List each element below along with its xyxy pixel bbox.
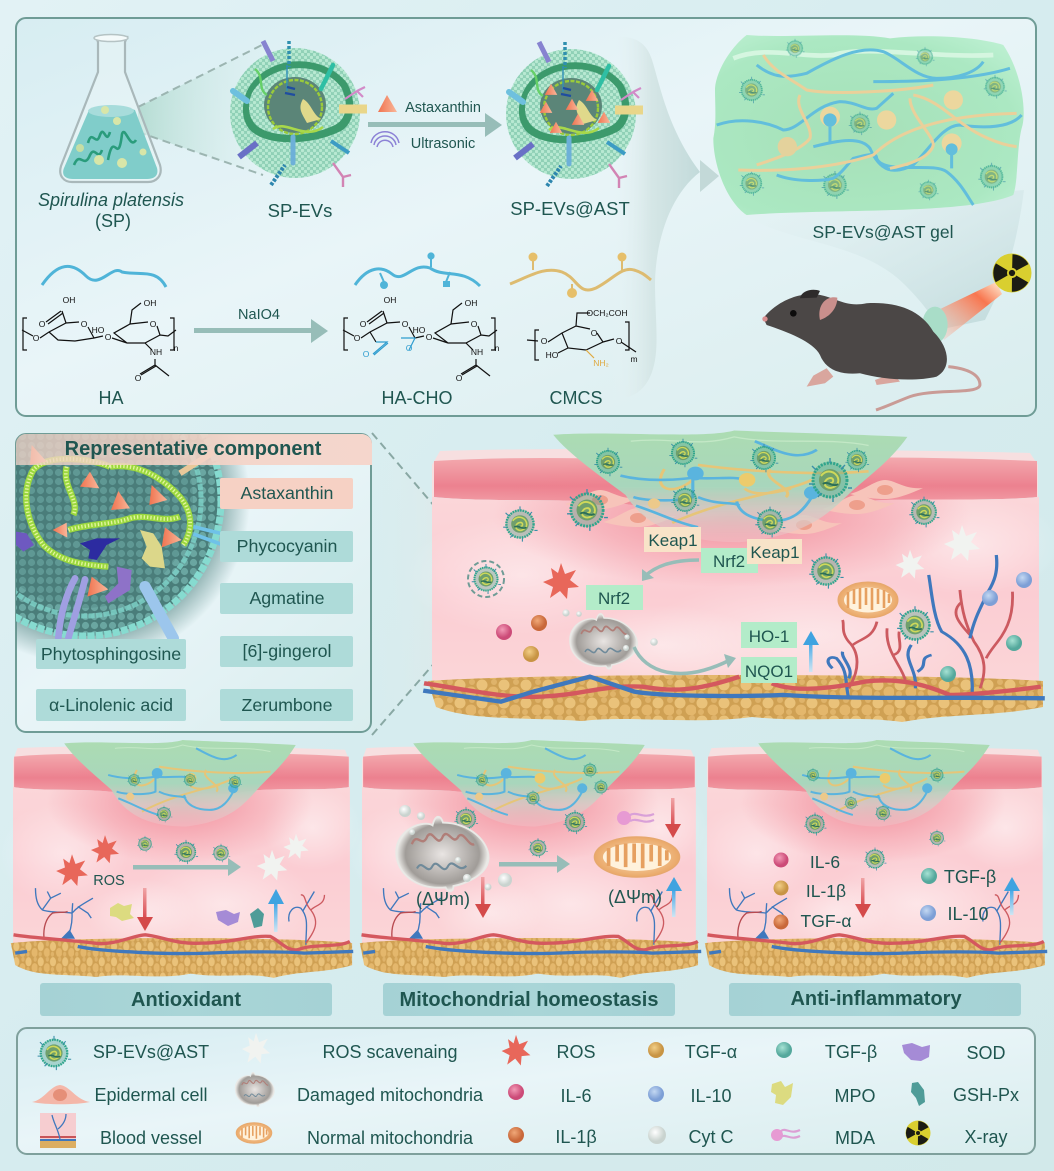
chemical structure: HA-CHO [343,295,500,383]
arrow: upregulation [803,631,819,672]
label: Agmatine [220,583,353,614]
chemical structure: HA-CHO: HO [413,325,426,335]
icon: SOD and GSH-Px [216,908,264,928]
chemical structure: HA: O [81,319,88,329]
label: Antioxidant: Antioxidant [131,989,241,1011]
list: pro-inflammatory cytokines: TGF-α [801,911,851,931]
chemical structure: HA: O [135,373,142,383]
hydrogel [64,740,296,827]
hydrogel [758,740,990,827]
funnel from gel to mouse [743,190,1024,330]
icon: MPO [110,903,134,921]
wedge: zoom from flask to SP-EVs [138,45,263,175]
label: Mitochondrial homeostasis: Mitochondrial homeostasis [400,989,658,1011]
blood vessels [708,888,1047,954]
legend: SP-EVs@AST: SP-EVs@AST [93,1042,209,1062]
label: Anti-inflammatory: Anti-inflammatory [790,988,962,1010]
SP-EVs@AST vesicle [506,42,643,188]
icon: scavenged ROS [257,834,309,880]
legend: Normal mitochondria [236,1123,474,1148]
label: Phycocyanin: Phycocyanin [237,536,337,556]
panel: preparation of SP-EVs@AST gel [16,18,1036,416]
label: Nrf2: Nrf2 [598,589,630,608]
label: Spirulina platensis: (SP) [95,211,131,231]
chemical structure: HA: HO [92,325,105,335]
legend: MPO [771,1081,876,1106]
legend: Blood vessel: Blood vessel [100,1128,202,1148]
legend: GSH-Px: GSH-Px [953,1085,1019,1105]
hydrogel [413,740,645,827]
arrow: increase [268,889,284,932]
chemical structure: HA-CHO: OH [465,298,477,308]
label: Keap1: Keap1 [648,531,698,550]
label: Zerumbone [220,689,353,721]
legend: Cyt C: Cyt C [688,1127,734,1147]
heading: Representative component: Representative component [65,438,322,460]
label: Zerumbone: Zerumbone [242,695,333,715]
label: HO-1 [741,622,797,648]
label: Spirulina platensis [38,190,184,231]
label: α-Linolenic acid [36,689,186,721]
label: Phytosphingosine: Phytosphingosine [41,644,181,664]
icon: CMCS chain [510,252,651,298]
panel: anti-inflammatory [690,740,1054,978]
arrow: restoration [499,855,570,873]
SP-EVs around wound [503,489,939,644]
chemical structure: HA-CHO: O [426,332,433,342]
chemical structure: HA-CHO: O [471,319,478,329]
panel: legend [17,1028,1035,1154]
label: NQO1: NQO1 [745,662,793,681]
brace connecting SP-EVs@AST, HA-CHO and CMCS to the gel [610,37,700,400]
label: Nrf2 complex [701,548,758,573]
blood vessels [362,888,701,954]
skin block [402,443,1054,722]
chemical structure: CMCS: O [591,328,598,338]
label: Astaxanthin [220,478,353,509]
label: [6]-gingerol [220,636,353,667]
icon: ROS [56,835,125,889]
chemical structure: CMCS: OCH₂COH [586,308,628,318]
skin block [690,741,1054,978]
SP-EVs [804,813,945,870]
chemical structure: HA-CHO: OH [384,295,396,305]
label: Keap1 second: Keap1 [750,543,800,562]
panel: mitochondrial homeostasis [346,740,708,978]
arrow: NaIO4 oxidation: NaIO4 [238,307,280,323]
legend: SP-EVs@AST [38,1036,209,1070]
epidermal cells [565,480,923,534]
legend: GSH-Px [911,1082,1019,1106]
legend: IL-6 [508,1084,592,1106]
legend: SOD [902,1043,1006,1063]
legend: Epidermal cell: Epidermal cell [94,1085,208,1105]
legend: SOD: SOD [966,1043,1006,1063]
legend: Blood vessel [40,1113,202,1148]
label: Phycocyanin [220,531,353,562]
spheres: cytokines [496,615,547,662]
SP-EVs inside gel [594,439,869,537]
chemical structure: CMCS: m [630,354,638,364]
SP-EVs vesicle [230,41,367,187]
chemical structure: HA-CHO: n [495,343,500,353]
icon: normal mitochondrion [838,582,898,618]
icon: ROS [543,563,579,599]
legend: IL-1β: IL-1β [555,1127,597,1147]
arrow: loading astaxanthin with ultrasound [368,95,502,152]
legend: MPO: MPO [834,1086,876,1106]
label: Antioxidant [40,983,332,1016]
chemical structure: HA: OH [144,298,156,308]
icon: X-ray source and beam [934,254,1032,340]
gel: SP-EVs@AST hydrogel [713,35,1024,215]
arrow: MDA decrease [665,798,681,838]
icon: normal mitochondrion [594,837,680,877]
chemical structure: HA: O [105,332,112,342]
illustration: mouse with gel [762,290,980,410]
label: HA: HA [98,388,124,408]
icon: ROS scavenged [896,525,980,579]
arrow: loading astaxanthin with ultrasound: Ultrasonic [411,136,475,152]
legend: Cyt C [648,1126,734,1147]
legend: TGF-α [648,1042,737,1062]
legend: IL-1β [508,1127,597,1147]
spheres: anti-inflammatory cytokines [940,572,1032,682]
chemical structure: HA: O [33,333,40,343]
list: pro-inflammatory cytokines: IL-1β [806,881,846,901]
chemical structure: CMCS: NH₂ [593,358,609,368]
chemical structure: CMCS [527,308,638,368]
label: SP-EVs@AST: SP-EVs@AST [510,198,630,219]
list: anti-inflammatory cytokines [920,867,996,924]
legend: ROS [502,1035,596,1065]
legend: Damaged mitochondria: Damaged mitochondria [297,1085,484,1105]
label: membrane potential low: (ΔΨm) [416,889,470,909]
chemical structure: CMCS: O [616,336,623,346]
skin block [0,741,363,978]
label: Anti-inflammatory [729,983,1021,1016]
chemical structure: HA: OH [63,295,75,305]
arrow: Nrf2 translocation [642,560,699,581]
illustration: vesicle cross-section [16,434,247,654]
hydrogel in wound [553,430,907,542]
SP-EVs in gel [806,767,945,821]
label: Phytosphingosine [36,639,186,669]
panel: representative component [15,433,372,733]
arrow: decrease [137,888,153,931]
label: SP-EVs: SP-EVs [268,200,332,221]
arrowhead: to gel [700,160,719,192]
SP-EVs in gel [475,762,609,806]
chemical structure: HA-CHO: NH [471,347,483,357]
label: NQO1 [741,657,797,683]
SP-EVs in gel [127,773,242,822]
chemical structure: HA: O [150,319,157,329]
label: Agmatine: Agmatine [249,588,325,608]
legend: TGF-α: TGF-α [685,1042,737,1062]
legend: TGF-β: TGF-β [825,1042,877,1062]
list: pro-inflammatory cytokines [774,852,851,931]
list: anti-inflammatory cytokines: TGF-β [944,867,996,887]
chemical structure: HA [22,295,179,383]
label: Mitochondrial homeostasis [383,983,675,1016]
SP-EVs [137,836,230,864]
panel: antioxidant [0,740,363,978]
arrow: decrease [855,878,871,918]
legend: X-ray [906,1120,1008,1147]
arrow: ROS clearance [133,858,241,876]
icon: HA-CHO chain [355,252,480,289]
arrow: decrease [475,877,491,918]
arrow: loading astaxanthin with ultrasound: Astaxanthin [405,100,481,116]
legend: Epidermal cell [32,1085,208,1105]
panel: skin mechanism overview [402,430,1054,722]
icon: HA chain [42,266,166,287]
legend: IL-10: IL-10 [690,1086,732,1106]
arrow: NaIO4 oxidation [194,307,328,343]
skin block [346,741,708,978]
icon: damaged mitochondrion with Cyt C [562,609,658,669]
blood vessels [423,555,1045,702]
label: Astaxanthin: Astaxanthin [241,483,333,503]
dashed circle: selected vesicle [468,561,504,597]
label: HA-CHO: HA-CHO [382,388,452,408]
chemical structure: HA-CHO: O [406,343,413,353]
chemical structure: HA: n [174,343,179,353]
legend: X-ray: X-ray [964,1127,1008,1147]
chemical structure: HA: O [39,319,46,329]
legend: Normal mitochondria: Normal mitochondria [307,1128,474,1148]
label: Spirulina platensis: Spirulina platensis [38,190,184,210]
legend: ROS scavenaing [242,1033,458,1063]
label: SP-EVs@AST gel: SP-EVs@AST gel [813,222,953,242]
chemical structure: HA-CHO: O [402,319,409,329]
label: [6]-gingerol: [6]-gingerol [243,641,331,661]
list: pro-inflammatory cytokines: IL-6 [810,852,840,872]
icon: MDA [617,811,654,825]
label: Keap1 second [747,539,802,564]
label: HO-1: HO-1 [749,627,789,646]
legend: IL-6: IL-6 [560,1086,592,1106]
chemical structure: CMCS: O [541,336,548,346]
chemical structure: HA-CHO: O [360,319,367,329]
arrow: mitochondria to HO-1 [634,647,736,673]
label: Keap1 [644,527,701,552]
arrow: increase [666,877,682,917]
icon: damaged mitochondrion [396,805,512,891]
legend: MDA: MDA [835,1128,875,1148]
label: Nrf2 [586,585,643,610]
icon: ROS: ROS [93,873,125,889]
legend: ROS: ROS [556,1042,596,1062]
chemical structure: HA-CHO: O [363,349,370,359]
heading: Representative component [16,434,372,465]
label: Nrf2 complex: Nrf2 [713,552,745,571]
legend: ROS scavenaing: ROS scavenaing [322,1042,458,1062]
legend: MDA [771,1128,875,1148]
chemical structure: HA-CHO: O [354,333,361,343]
list: anti-inflammatory cytokines: IL-10 [947,904,989,924]
legend: TGF-β [776,1042,877,1062]
blood vessels [14,888,353,954]
chemical structure: HA-CHO: O [456,373,463,383]
legend: IL-10 [648,1086,732,1106]
label: CMCS: CMCS [550,388,602,408]
SP-EVs [454,807,587,858]
arrow: increase [1004,877,1020,915]
chemical structure: HA: NH [150,347,162,357]
label: α-Linolenic acid: α-Linolenic acid [49,695,173,715]
icon: Erlenmeyer flask [60,34,161,182]
label: membrane potential restored: (ΔΨm) [608,887,662,907]
legend: Damaged mitochondria [235,1072,484,1107]
chemical structure: CMCS: HO [546,350,559,360]
wedge: zoom from skin to component panel [372,433,500,735]
